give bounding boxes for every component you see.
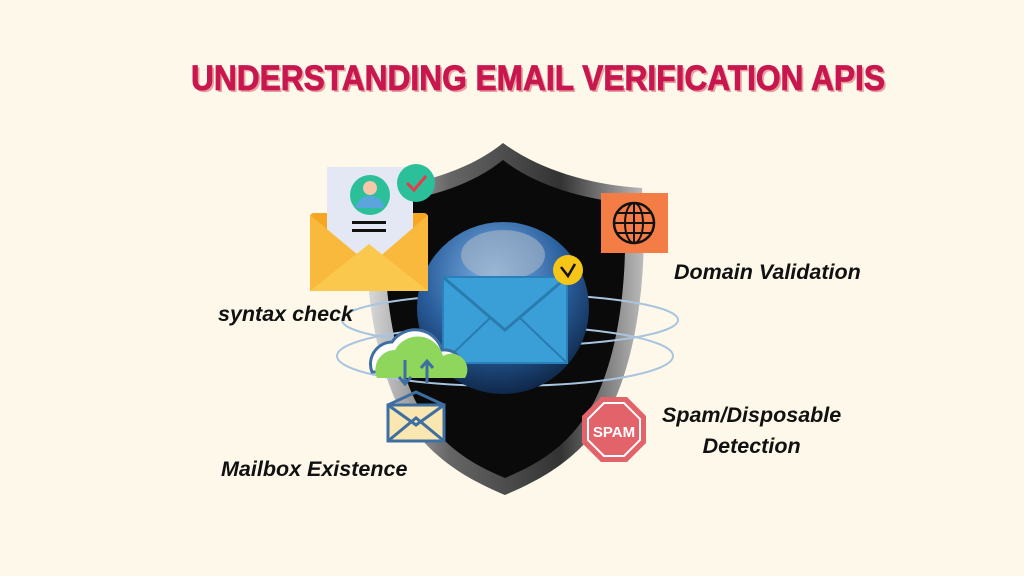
label: domain validation: Domain Validation [674, 260, 861, 284]
orbit rings [337, 294, 678, 386]
sphere with envelope [417, 222, 589, 394]
title: UNDERSTANDING EMAIL VERIFICATION APIS [191, 59, 885, 98]
shield [366, 143, 644, 495]
icon: syntax check envelope [310, 164, 435, 291]
label: syntax check: syntax check [218, 302, 353, 326]
label: spam/disposable detection [662, 403, 841, 458]
label: spam/disposable detection: Detection [703, 434, 801, 458]
title: UNDERSTANDING EMAIL VERIFICATION APIS [193, 61, 887, 100]
icon: spam stop sign: SPAM [593, 424, 635, 441]
icon: spam stop sign [582, 397, 646, 462]
label: spam/disposable detection: Spam/Disposable [662, 403, 841, 427]
icon: cloud mailbox [370, 330, 467, 441]
icon: globe [601, 193, 668, 253]
label: mailbox existence: Mailbox Existence [221, 457, 407, 481]
